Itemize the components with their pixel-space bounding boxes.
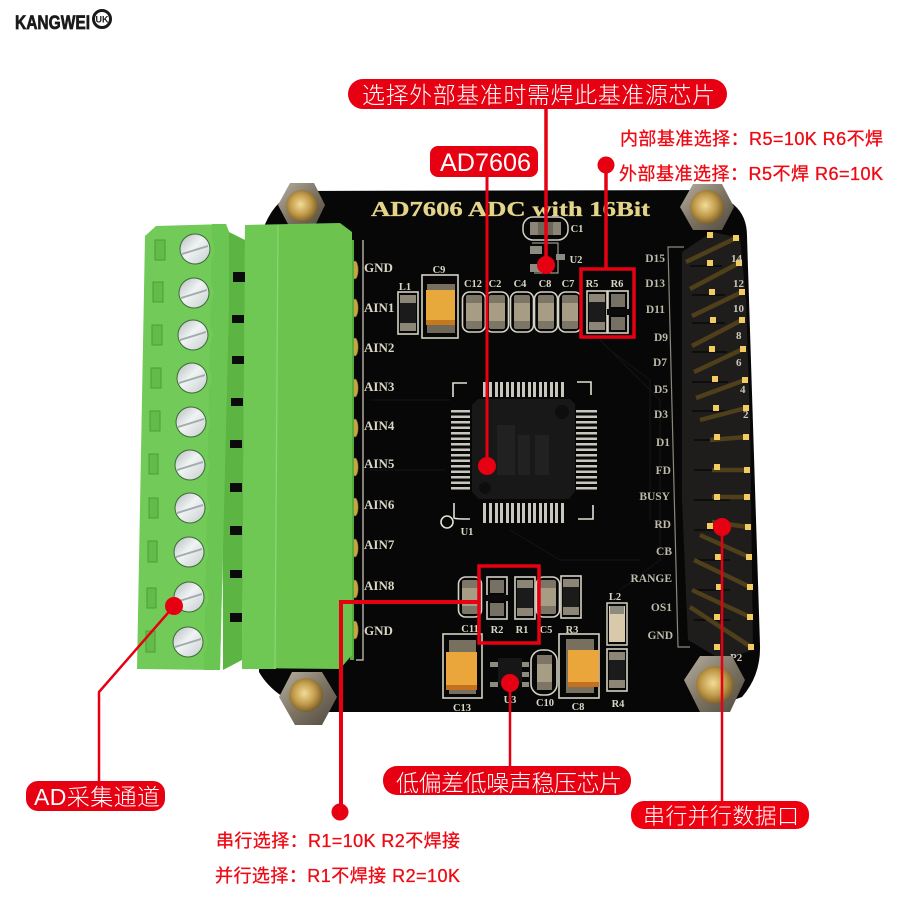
parallel/serial pin header: P2 bbox=[730, 652, 743, 664]
silkscreen: digital signal labels: D15 bbox=[645, 253, 665, 265]
silkscreen: digital signal labels: FD bbox=[656, 465, 671, 477]
callout: R1 R2 serial parallel selection bbox=[215, 566, 539, 886]
AD7606 chip U1: U1 bbox=[461, 527, 473, 538]
callout: low-noise regulator: 低偏差低噪声稳压芯片 bbox=[396, 770, 622, 796]
bottom components: C11, R2, R1, C5, R3, L2, R4, C8, C10, U3, C13: R3 bbox=[566, 625, 578, 636]
bottom components: C11, R2, R1, C5, R3, L2, R4, C8, C10, U3, C13: R4 bbox=[612, 699, 625, 710]
logo: KANGWEI: UK bbox=[96, 14, 109, 24]
top components: C1, U2, L1, C9, capacitors, R5, R6: C12 bbox=[464, 279, 482, 290]
silkscreen: analog input labels: AIN6 bbox=[364, 497, 395, 512]
external reference text: 外部基准选择：R5不焊 R6=10K bbox=[619, 164, 883, 184]
silkscreen: digital signal labels bbox=[630, 253, 673, 642]
silkscreen: analog input labels: AIN3 bbox=[364, 379, 395, 394]
faint trace texture bbox=[370, 340, 660, 590]
bottom components: C11, R2, R1, C5, R3, L2, R4, C8, C10, U3, C13: R1 bbox=[516, 625, 528, 636]
bottom components: C11, R2, R1, C5, R3, L2, R4, C8, C10, U3, C13: R2 bbox=[491, 625, 503, 636]
bottom components: C11, R2, R1, C5, R3, L2, R4, C8, C10, U3, C13: C5 bbox=[540, 625, 552, 636]
bottom components: C11, R2, R1, C5, R3, L2, R4, C8, C10, U3, C13: C13 bbox=[453, 703, 471, 714]
silkscreen: digital signal labels: D1 bbox=[656, 437, 670, 449]
callout: AD acquisition channels bbox=[26, 597, 183, 811]
top components: C1, U2, L1, C9, capacitors, R5, R6: C4 bbox=[514, 279, 527, 290]
top components: C1, U2, L1, C9, capacitors, R5, R6: C7 bbox=[562, 279, 574, 290]
silkscreen: analog input labels: GND bbox=[364, 623, 393, 638]
header gold pins bbox=[352, 261, 358, 639]
serial selection text: 串行选择：R1=10K R2不焊接 bbox=[216, 831, 460, 851]
top components: C1, U2, L1, C9, capacitors, R5, R6 bbox=[398, 217, 629, 338]
silkscreen: digital signal labels: GND bbox=[647, 630, 673, 642]
silkscreen: analog input labels: AIN7 bbox=[364, 537, 395, 552]
silkscreen: digital signal labels: D13 bbox=[645, 278, 665, 290]
chip silk corners bbox=[441, 382, 593, 528]
silkscreen: digital signal labels: D5 bbox=[654, 384, 668, 396]
callout: reference source chip bbox=[348, 79, 727, 274]
silkscreen: digital signal labels: CB bbox=[656, 546, 672, 558]
top components: C1, U2, L1, C9, capacitors, R5, R6: R6 bbox=[611, 279, 623, 290]
circuit board bbox=[259, 190, 760, 714]
bottom components: C11, R2, R1, C5, R3, L2, R4, C8, C10, U3, C13: L2 bbox=[609, 592, 621, 603]
terminal screws bbox=[168, 230, 214, 662]
mounting bolts bbox=[278, 183, 745, 725]
top components: C1, U2, L1, C9, capacitors, R5, R6: L1 bbox=[399, 282, 411, 293]
callout: serial parallel data port bbox=[631, 518, 809, 829]
bottom components: C11, R2, R1, C5, R3, L2, R4, C8, C10, U3, C13: C11 bbox=[461, 624, 479, 635]
parallel/serial pin header bbox=[668, 232, 754, 664]
top components: C1, U2, L1, C9, capacitors, R5, R6: R5 bbox=[586, 279, 598, 290]
callout: low-noise regulator bbox=[383, 674, 631, 796]
bottom components: C11, R2, R1, C5, R3, L2, R4, C8, C10, U3, C13: U3 bbox=[504, 695, 516, 706]
silkscreen: digital signal labels: RANGE bbox=[630, 573, 672, 585]
top components: C1, U2, L1, C9, capacitors, R5, R6: C1 bbox=[571, 224, 583, 235]
silkscreen: analog input labels: AIN5 bbox=[364, 456, 395, 471]
silkscreen: analog input labels: AIN8 bbox=[364, 578, 395, 593]
silkscreen: digital signal labels: RD bbox=[654, 519, 671, 531]
silkscreen: digital signal labels: OS1 bbox=[651, 602, 672, 614]
top components: C1, U2, L1, C9, capacitors, R5, R6: C2 bbox=[489, 279, 501, 290]
callout: serial parallel data port: 串行并行数据口 bbox=[643, 804, 799, 829]
parallel/serial pin header: 6 bbox=[736, 357, 742, 369]
bottom components: C11, R2, R1, C5, R3, L2, R4, C8, C10, U3, C13: C10 bbox=[536, 698, 554, 709]
callout: AD7606: AD7606 bbox=[440, 149, 531, 177]
bottom components: C11, R2, R1, C5, R3, L2, R4, C8, C10, U3, C13 bbox=[443, 576, 627, 714]
green terminal block: PCB header bbox=[242, 223, 358, 669]
top components: C1, U2, L1, C9, capacitors, R5, R6: C8 bbox=[539, 279, 551, 290]
top components: C1, U2, L1, C9, capacitors, R5, R6: U2 bbox=[570, 255, 582, 266]
parallel/serial pin header: 4 bbox=[740, 384, 746, 396]
silkscreen: analog input labels: AIN2 bbox=[364, 340, 394, 355]
callout: R5 R6 reference selection bbox=[581, 129, 883, 337]
silkscreen: analog input labels: AIN4 bbox=[364, 418, 395, 433]
bottom components: C11, R2, R1, C5, R3, L2, R4, C8, C10, U3, C13: C8 bbox=[572, 702, 584, 713]
silkscreen: digital signal labels: D11 bbox=[646, 304, 665, 316]
chip pins bbox=[451, 382, 597, 523]
green terminal block: screw plug bbox=[137, 224, 245, 670]
callout: reference source chip: 选择外部基准时需焊此基准源芯片 bbox=[362, 82, 715, 108]
logo: KANGWEI: KANGWEI bbox=[15, 13, 90, 34]
silkscreen: analog input labels bbox=[356, 240, 395, 660]
callout: AD acquisition channels: AD采集通道 bbox=[34, 784, 160, 810]
parallel/serial pin header: 2 bbox=[743, 409, 749, 421]
silkscreen: digital signal labels: D3 bbox=[654, 409, 668, 421]
top components: C1, U2, L1, C9, capacitors, R5, R6: C9 bbox=[433, 265, 445, 276]
board title: AD7606 ADC with 16Bit bbox=[371, 197, 650, 221]
silkscreen: digital signal labels: BUSY bbox=[639, 491, 671, 503]
callout: AD7606 bbox=[430, 146, 538, 475]
silkscreen: digital signal labels: D7 bbox=[653, 357, 667, 369]
silkscreen: analog input labels: AIN1 bbox=[364, 300, 394, 315]
parallel/serial pin header: 12 bbox=[733, 278, 744, 290]
parallel/serial pin header: 10 bbox=[733, 303, 744, 315]
silkscreen: digital signal labels: D9 bbox=[654, 332, 668, 344]
internal reference text: 内部基准选择：R5=10K R6不焊 bbox=[620, 129, 883, 149]
parallel/serial pin header: 8 bbox=[736, 330, 742, 342]
parallel/serial pin header: 14 bbox=[731, 253, 742, 265]
silkscreen: analog input labels: GND bbox=[364, 260, 393, 275]
parallel selection text: 并行选择：R1不焊接 R2=10K bbox=[215, 866, 460, 886]
AD7606 chip U1 bbox=[441, 382, 597, 538]
